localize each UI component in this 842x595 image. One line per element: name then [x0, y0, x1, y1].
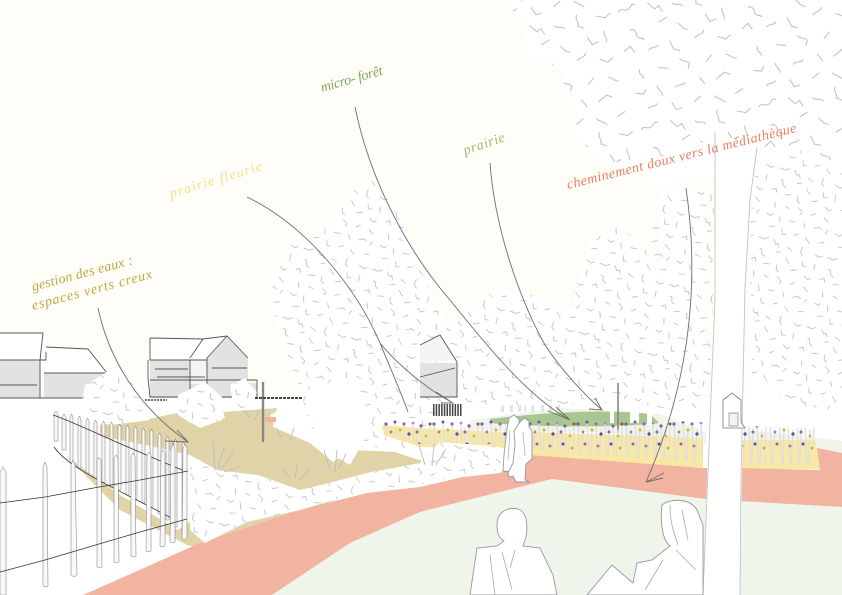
yellow meadow band right — [741, 440, 822, 469]
flowers and stems — [384, 418, 703, 462]
label: gestion des eaux: espaces verts creux — [30, 267, 155, 314]
tree trunk foreground — [703, 132, 757, 595]
far flowers — [497, 405, 560, 412]
house: centre — [148, 336, 257, 398]
foreground bush — [190, 442, 512, 543]
grass tufts — [213, 410, 446, 480]
pale green meadow: right of trunk — [745, 430, 842, 456]
tree: center large — [270, 180, 458, 470]
pale green meadow: background — [470, 408, 706, 445]
pale green lawn — [272, 479, 842, 595]
label: prairie fleurie: prairie fleurie — [167, 159, 264, 202]
leader arrow: prairie fleurie — [247, 197, 453, 412]
flowers right of trunk — [742, 426, 815, 465]
tan rain garden — [100, 408, 425, 495]
tree canopy texture: top right — [497, 0, 842, 165]
leader arrow: micro-forêt — [355, 107, 570, 420]
red path — [83, 448, 842, 595]
label: prairie: prairie — [460, 131, 507, 159]
foreground bush texture — [190, 442, 512, 543]
house: behind tree — [420, 335, 457, 397]
icon: birdhouse — [723, 393, 745, 428]
leader arrow: espaces verts creux — [98, 308, 188, 442]
tree: behind the trunk texture — [630, 190, 714, 410]
trees: right side — [750, 150, 842, 412]
background tree trunks in meadow — [610, 383, 652, 433]
tree: mid background texture — [450, 225, 670, 405]
label: gestion des eaux: gestion des eaux : — [30, 253, 134, 295]
seated person: left — [470, 508, 557, 595]
signpost and bench — [145, 382, 462, 442]
seated person: right — [587, 500, 703, 595]
tree: behind the trunk — [660, 185, 705, 400]
fence: rear curved section — [53, 411, 187, 535]
yellow meadow band — [382, 425, 703, 468]
tree: center large texture — [270, 180, 458, 470]
label: micro-forêt: micro- forêt — [319, 63, 386, 96]
tan strip along fence and path — [65, 455, 365, 548]
fence: front section — [0, 443, 188, 595]
tree: mid background — [450, 225, 670, 412]
leader arrow: cheminement doux — [646, 188, 692, 482]
walkers — [503, 415, 532, 482]
house: left barns — [0, 333, 112, 398]
tree canopy: top right — [497, 0, 842, 420]
leader arrow: prairie — [490, 163, 602, 410]
micro-forest green strip — [490, 411, 659, 426]
shrubs behind the fence — [80, 370, 370, 465]
label: cheminement doux vers la médiathèque: cheminement doux vers la médiathèque — [565, 121, 798, 193]
ground base — [0, 398, 842, 595]
